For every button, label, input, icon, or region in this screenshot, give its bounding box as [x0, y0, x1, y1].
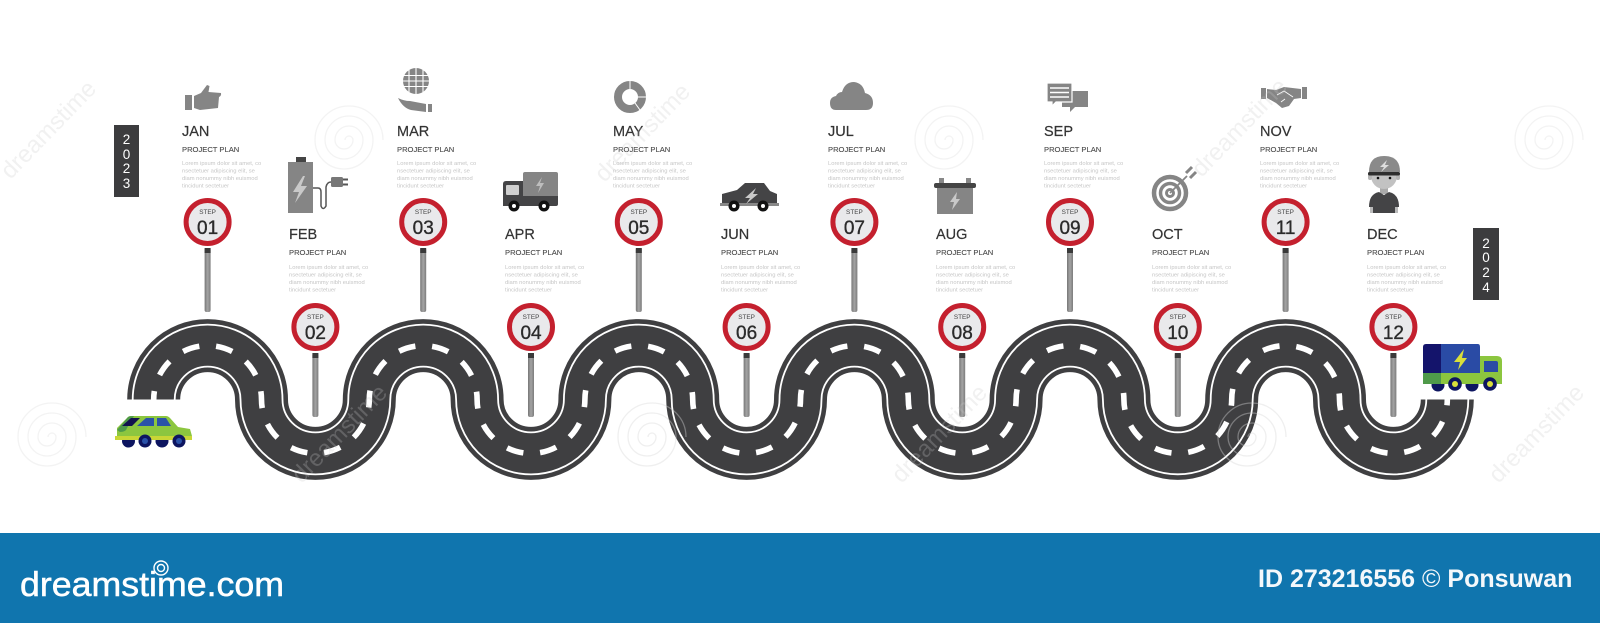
- sign 04: [506, 302, 556, 352]
- month OCT: OCT: [1152, 227, 1183, 243]
- sign pole: [1283, 248, 1289, 312]
- watermark: dreamstime: [589, 78, 696, 187]
- sign 07: [829, 197, 879, 247]
- description: nsectetuer adipiscing elit, se: [1152, 272, 1225, 278]
- description: Lorem ipsum dolor sit amet, co: [828, 161, 907, 167]
- icon: thumbs up: [185, 85, 221, 110]
- description: tincidunt sectetuer: [1260, 184, 1307, 190]
- description: diam nonummy nibh euismod: [613, 176, 689, 182]
- icon: electric truck: [503, 172, 558, 212]
- description: nsectetuer adipiscing elit, se: [613, 168, 686, 174]
- description: nsectetuer adipiscing elit, se: [1367, 272, 1440, 278]
- sign 09: 09: [1059, 218, 1081, 239]
- sign 08: [937, 302, 987, 352]
- sign 12: STEP: [1385, 314, 1402, 321]
- icon: blue electric truck at finish: [1423, 344, 1502, 392]
- sign 01: 01: [197, 218, 218, 239]
- description: Lorem ipsum dolor sit amet, co: [182, 161, 261, 167]
- icon: worker with helmet: [1368, 156, 1400, 213]
- step 07 July: [828, 82, 907, 312]
- description: tincidunt sectetuer: [936, 288, 983, 294]
- step 03 March: [397, 68, 476, 312]
- sign 02: STEP: [307, 314, 324, 321]
- description: nsectetuer adipiscing elit, se: [1044, 168, 1117, 174]
- sign 05: [614, 197, 664, 247]
- sign 01: [183, 197, 233, 247]
- watermark: [0, 73, 1590, 488]
- sign 05: 05: [628, 218, 649, 239]
- description: Lorem ipsum dolor sit amet, co: [1260, 161, 1339, 167]
- subheading: PROJECT PLAN: [721, 248, 778, 257]
- year badge 2023: 3: [123, 176, 130, 191]
- sign 11: 11: [1276, 218, 1295, 239]
- description: tincidunt sectetuer: [182, 184, 229, 190]
- icon: electric car: [720, 183, 779, 212]
- sign 03: STEP: [415, 209, 432, 216]
- description: diam nonummy nibh euismod: [721, 280, 797, 286]
- sign 09: STEP: [1062, 209, 1078, 216]
- sign pole: [528, 353, 534, 417]
- description: diam nonummy nibh euismod: [1367, 280, 1443, 286]
- sign 04: STEP: [523, 314, 539, 321]
- sign pole: [959, 353, 965, 417]
- description: tincidunt sectetuer: [1367, 288, 1414, 294]
- description: Lorem ipsum dolor sit amet, co: [613, 161, 692, 167]
- subheading: PROJECT PLAN: [1260, 145, 1317, 154]
- step 05 May: [613, 81, 692, 312]
- subheading: PROJECT PLAN: [613, 145, 670, 154]
- watermark: dreamstime: [286, 379, 393, 488]
- sign 10: [1153, 302, 1203, 352]
- brand name: dreamstime.com: [20, 566, 284, 604]
- year badge 2024: 0: [1482, 250, 1490, 265]
- description: tincidunt sectetuer: [1152, 288, 1199, 294]
- month SEP: SEP: [1044, 124, 1073, 140]
- description: nsectetuer adipiscing elit, se: [1260, 168, 1333, 174]
- description: diam nonummy nibh euismod: [289, 280, 365, 286]
- sign pole: [205, 248, 211, 312]
- description: tincidunt sectetuer: [828, 184, 875, 190]
- year badge 2023: [114, 125, 139, 197]
- month AUG: AUG: [936, 227, 967, 243]
- month DEC: DEC: [1367, 227, 1398, 243]
- icon: car battery: [934, 178, 976, 214]
- step 11 November: [1260, 87, 1339, 312]
- month NOV: NOV: [1260, 124, 1292, 140]
- subheading: PROJECT PLAN: [828, 145, 885, 154]
- description: Lorem ipsum dolor sit amet, co: [397, 161, 476, 167]
- logo spiral: [154, 561, 168, 575]
- sign pole: [744, 353, 750, 417]
- sign 05: STEP: [630, 209, 647, 216]
- sign 01: STEP: [199, 209, 216, 216]
- sign 02: [290, 302, 340, 352]
- description: tincidunt sectetuer: [397, 184, 444, 190]
- sign 07: 07: [844, 218, 865, 239]
- subheading: PROJECT PLAN: [182, 145, 239, 154]
- icon: cloud: [830, 82, 873, 110]
- description: tincidunt sectetuer: [289, 288, 336, 294]
- description: diam nonummy nibh euismod: [1260, 176, 1336, 182]
- sign pole: [1390, 353, 1396, 417]
- description: tincidunt sectetuer: [1044, 184, 1091, 190]
- year badge 2023: 2: [123, 161, 130, 176]
- subheading: PROJECT PLAN: [289, 248, 346, 257]
- step 04 April: [503, 172, 584, 417]
- description: Lorem ipsum dolor sit amet, co: [1152, 265, 1231, 271]
- icon: globe on hand: [398, 68, 432, 112]
- sign 06: [722, 302, 772, 352]
- sign 11: [1261, 197, 1311, 247]
- icon: handshake: [1261, 87, 1307, 108]
- icon: battery and plug: [288, 157, 348, 213]
- year badge 2023: 0: [123, 147, 130, 162]
- description: tincidunt sectetuer: [613, 184, 660, 190]
- step 01 January: [182, 85, 261, 312]
- description: Lorem ipsum dolor sit amet, co: [1367, 265, 1446, 271]
- year badge 2023: 2: [123, 132, 130, 147]
- month JUN: JUN: [721, 227, 749, 243]
- description: diam nonummy nibh euismod: [936, 280, 1012, 286]
- step 10 October: [1152, 167, 1231, 417]
- description: tincidunt sectetuer: [505, 288, 552, 294]
- month MAR: MAR: [397, 124, 429, 140]
- sign pole: [636, 248, 642, 312]
- description: tincidunt sectetuer: [721, 288, 768, 294]
- step 02 February: [288, 157, 368, 417]
- step 09 September: [1044, 83, 1123, 312]
- step 12 December: [1367, 156, 1446, 417]
- step 06 June: [720, 183, 800, 417]
- sign 08: STEP: [954, 314, 971, 321]
- sign 12: [1368, 302, 1418, 352]
- year badge 2024: 4: [1482, 280, 1490, 295]
- description: nsectetuer adipiscing elit, se: [505, 272, 578, 278]
- sign 08: 08: [952, 323, 973, 344]
- icon: green car at start: [115, 416, 192, 448]
- sign pole: [1067, 248, 1073, 312]
- footer banner: [0, 533, 1600, 623]
- sign 02: 02: [305, 323, 326, 344]
- sign pole: [851, 248, 857, 312]
- description: Lorem ipsum dolor sit amet, co: [289, 265, 368, 271]
- description: nsectetuer adipiscing elit, se: [397, 168, 470, 174]
- sign 06: STEP: [738, 314, 755, 321]
- icon: donut chart: [618, 81, 646, 110]
- watermark: dreamstime: [886, 379, 993, 488]
- sign 10: STEP: [1169, 314, 1186, 321]
- sign 06: 06: [736, 323, 757, 344]
- sign 10: 10: [1167, 323, 1188, 344]
- sign 07: STEP: [846, 209, 863, 216]
- sign 09: [1045, 197, 1095, 247]
- month JAN: JAN: [182, 124, 209, 140]
- description: Lorem ipsum dolor sit amet, co: [1044, 161, 1123, 167]
- description: nsectetuer adipiscing elit, se: [828, 168, 901, 174]
- subheading: PROJECT PLAN: [1152, 248, 1209, 257]
- subheading: PROJECT PLAN: [1044, 145, 1101, 154]
- icon: target with arrow: [1154, 167, 1196, 209]
- year badge 2024: 2: [1482, 236, 1490, 251]
- description: Lorem ipsum dolor sit amet, co: [936, 265, 1015, 271]
- image id and credit: ID 273216556 © Ponsuwan: [1258, 565, 1572, 593]
- description: diam nonummy nibh euismod: [1152, 280, 1228, 286]
- description: Lorem ipsum dolor sit amet, co: [505, 265, 584, 271]
- month FEB: FEB: [289, 227, 317, 243]
- icon: chat bubbles: [1047, 83, 1088, 112]
- sign 03: [398, 197, 448, 247]
- month APR: APR: [505, 227, 535, 243]
- description: Lorem ipsum dolor sit amet, co: [721, 265, 800, 271]
- watermark: dreamstime: [1186, 73, 1293, 182]
- sign pole: [1175, 353, 1181, 417]
- sign 04: 04: [520, 323, 542, 344]
- description: diam nonummy nibh euismod: [828, 176, 904, 182]
- description: nsectetuer adipiscing elit, se: [182, 168, 255, 174]
- description: nsectetuer adipiscing elit, se: [289, 272, 362, 278]
- description: diam nonummy nibh euismod: [505, 280, 581, 286]
- step 08 August: [934, 178, 1015, 417]
- month MAY: MAY: [613, 124, 644, 140]
- subheading: PROJECT PLAN: [397, 145, 454, 154]
- month JUL: JUL: [828, 124, 854, 140]
- sign pole: [312, 353, 318, 417]
- year badge 2024: 2: [1482, 265, 1490, 280]
- year badge 2024: [1473, 228, 1499, 300]
- sign 12: 12: [1383, 323, 1404, 344]
- description: nsectetuer adipiscing elit, se: [936, 272, 1009, 278]
- description: nsectetuer adipiscing elit, se: [721, 272, 794, 278]
- sign pole: [420, 248, 426, 312]
- subheading: PROJECT PLAN: [936, 248, 993, 257]
- road: [133, 325, 1468, 474]
- watermark: dreamstime: [1483, 379, 1590, 488]
- subheading: PROJECT PLAN: [1367, 248, 1424, 257]
- description: diam nonummy nibh euismod: [1044, 176, 1120, 182]
- subheading: PROJECT PLAN: [505, 248, 562, 257]
- description: diam nonummy nibh euismod: [182, 176, 258, 182]
- description: diam nonummy nibh euismod: [397, 176, 473, 182]
- sign 11: STEP: [1277, 209, 1294, 216]
- sign 03: 03: [413, 218, 434, 239]
